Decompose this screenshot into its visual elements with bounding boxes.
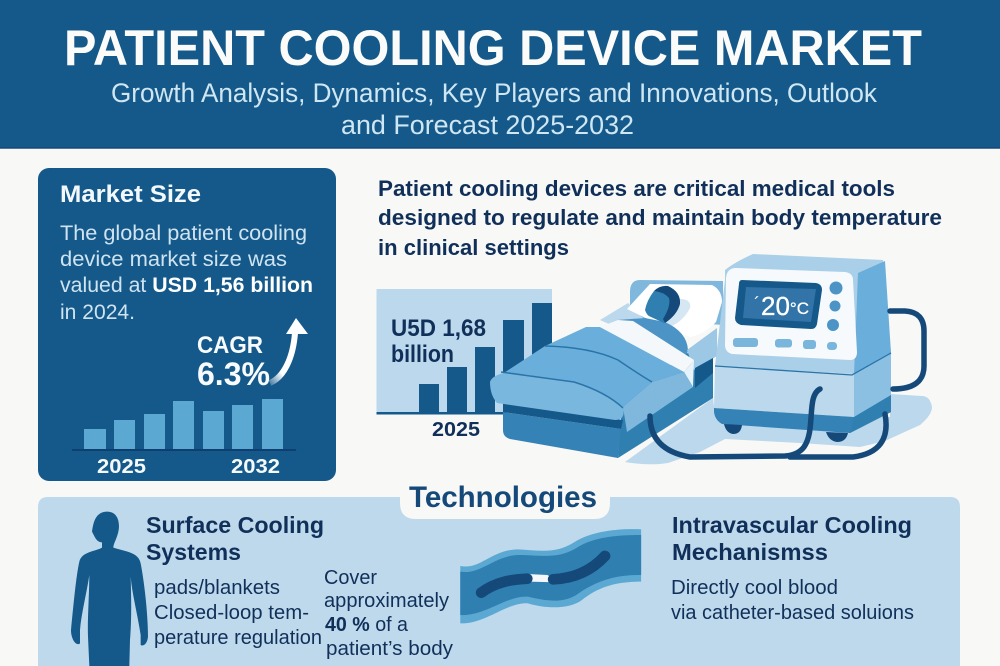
CAGR callout: CAGR [197, 332, 263, 359]
CAGR callout: 6.3% [197, 356, 270, 392]
chart axis labels [97, 456, 280, 478]
market size description [60, 222, 313, 324]
CAGR callout [197, 332, 270, 392]
body coverage note: approximately [324, 590, 449, 612]
body coverage note: Cover [324, 567, 377, 589]
surface cooling heading: Surface Cooling [146, 512, 324, 538]
machine body [714, 254, 891, 442]
header banner [0, 0, 1000, 149]
pillow [600, 284, 722, 337]
intro heading [378, 176, 942, 260]
body coverage note: patient’s body [326, 638, 453, 660]
chart value label [391, 315, 486, 368]
illustration: patient in bed with cooling machine [490, 254, 932, 464]
temperature display: ´ [754, 294, 760, 314]
subtitle [111, 78, 877, 140]
market size description: valued at USD 1,56 billion [60, 274, 313, 297]
machine wheels [724, 424, 848, 442]
intravascular cooling heading: Intravascular Cooling [672, 512, 912, 538]
surface cooling description: Closed-loop tem- [154, 602, 309, 624]
control buttons [733, 338, 837, 350]
surface cooling description [154, 577, 322, 649]
control panel [725, 268, 857, 360]
surface cooling description: perature regulation [154, 627, 322, 649]
chart axis labels: 2025 [97, 456, 146, 478]
panel: technologies [38, 481, 960, 666]
surface cooling heading: Systems [146, 539, 241, 565]
subtitle: Growth Analysis, Dynamics, Key Players and Innovations, Outlook [111, 78, 877, 108]
icon: blood vessel with catheter [460, 529, 641, 623]
bed headboard [630, 280, 723, 325]
floor shadow [625, 394, 932, 464]
intravascular cooling description: Directly cool blood [671, 577, 838, 599]
market size description: The global patient cooling [60, 222, 307, 245]
control dials [827, 282, 842, 331]
icon: growth arrow [270, 318, 308, 383]
market size description: in 2024. [60, 301, 135, 324]
temperature display [735, 280, 822, 329]
temperature display: °C [790, 299, 809, 318]
bed base front [503, 403, 623, 458]
chart value label: billion [391, 341, 454, 368]
patient [617, 286, 688, 358]
chart value label: U5D 1,68 [391, 315, 486, 342]
intro heading: in clinical settings [378, 235, 569, 260]
intro heading: designed to regulate and maintain body temperature [378, 205, 942, 230]
bed base side [618, 328, 717, 458]
chart axis labels: 2032 [231, 456, 280, 478]
body coverage note: 40 % of a [325, 614, 409, 636]
intravascular cooling heading: Mechanismss [672, 539, 828, 565]
intravascular cooling heading [672, 512, 912, 565]
surface cooling heading [146, 512, 324, 565]
chart: USD 1,68 billion in 2025 [376, 289, 552, 441]
icon: human body silhouette [71, 512, 148, 666]
blanket [490, 320, 694, 432]
market size description: device market size was [60, 248, 287, 271]
coolant tubing [650, 311, 924, 457]
body coverage note [324, 567, 453, 660]
title: PATIENT COOLING DEVICE MARKET [64, 20, 922, 76]
intro heading: Patient cooling devices are critical medical tools [378, 176, 895, 201]
subtitle: and Forecast 2025-2032 [341, 110, 634, 140]
surface cooling description: pads/blankets [154, 577, 280, 599]
panel: market size [38, 168, 336, 481]
chart year label: 2025 [432, 419, 480, 441]
panel heading: Market Size [60, 181, 201, 208]
intravascular cooling description [671, 577, 914, 624]
section heading tab: Technologies [409, 481, 597, 514]
bar chart: market growth [72, 399, 296, 478]
intravascular cooling description: via catheter-based soluions [671, 602, 914, 624]
temperature display: 20 [761, 291, 790, 321]
